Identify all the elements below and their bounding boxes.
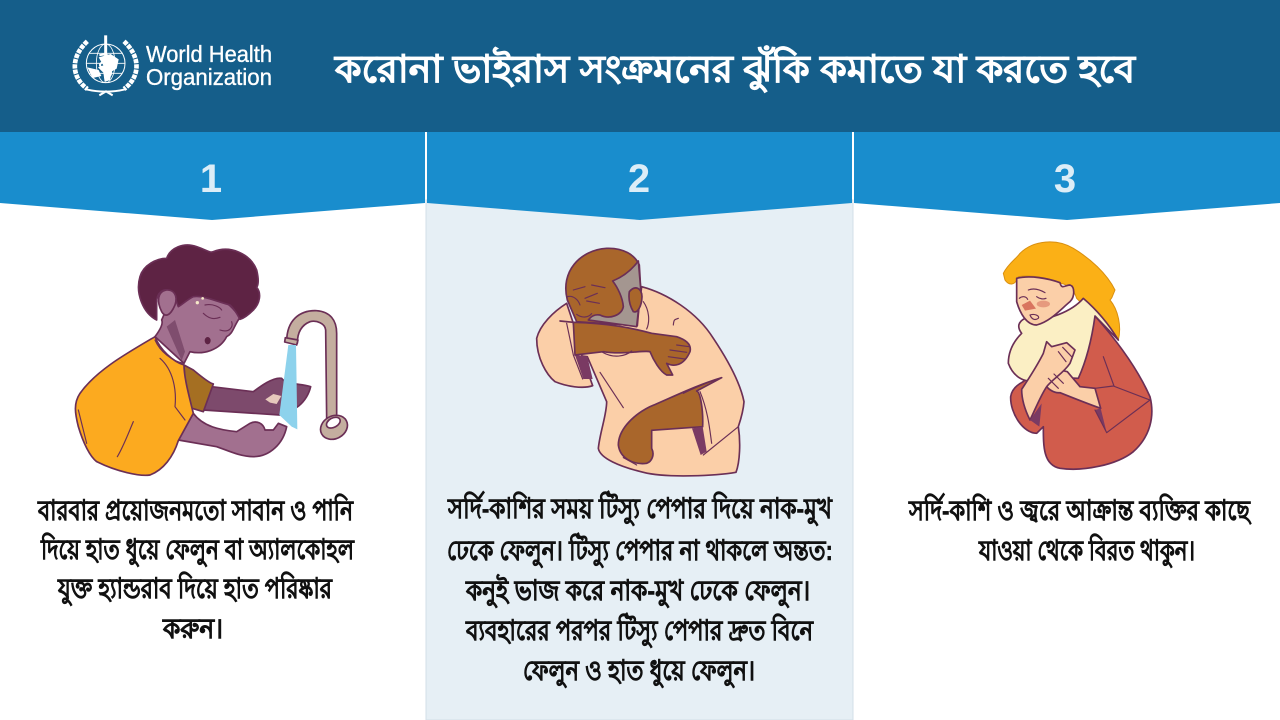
fever cheeks and nose — [1022, 301, 1050, 311]
WHO logo — [75, 35, 272, 95]
scarf — [1008, 298, 1118, 381]
faucet — [285, 311, 352, 444]
neck and face — [155, 293, 240, 363]
icon: sick woman with scarf — [1003, 242, 1152, 469]
face — [1017, 277, 1074, 325]
step 3 text: যাওয়া থেকে বিরত থাকুন। — [978, 533, 1195, 568]
panel: header band — [0, 0, 1280, 132]
step 2 text: সর্দি-কাশির সময় টিস্যু পেপার দিয়ে নাক-মুখ — [447, 490, 833, 526]
water stream — [279, 345, 297, 429]
panel: centre column background — [426, 200, 853, 720]
beard and side hair — [588, 261, 641, 327]
raised forearm — [560, 321, 690, 375]
title: করোনা ভাইরাস সংক্রমনের ঝুঁকি কমাতে যা করতে হবে — [333, 45, 1137, 94]
step 1 number banner: 1 — [200, 157, 222, 201]
step 2 text: কনুই ভাজ করে নাক-মুখ ঢেকে ফেলুন। — [465, 574, 810, 608]
step 2 text — [447, 490, 833, 688]
upper hand and forearm — [1022, 342, 1075, 420]
panel: step 3 — [854, 132, 1280, 568]
logo wordmark: Organization — [146, 64, 272, 90]
step 1 number banner — [0, 132, 425, 220]
icon: WHO emblem — [75, 35, 136, 95]
facial features — [196, 297, 232, 344]
head — [566, 248, 641, 326]
step 1 text: করুন। — [162, 613, 223, 644]
step 1 text: যুক্ত হ্যান্ডরাব দিয়ে হাত পরিষ্কার — [57, 571, 333, 606]
ear — [629, 288, 642, 312]
step 2 number banner — [427, 132, 852, 220]
hair — [139, 245, 260, 320]
panel: step 1 — [0, 132, 425, 644]
step 3 number banner — [854, 132, 1280, 220]
step 2 number banner: 2 — [628, 157, 650, 201]
step 1 text — [37, 493, 355, 644]
step 1 text: দিয়ে হাত ধুয়ে ফেলুন বা অ্যালকোহল — [40, 532, 355, 567]
step 3 text — [908, 493, 1252, 568]
logo wordmark — [146, 41, 272, 90]
hair — [1003, 242, 1120, 340]
robe sleeve raised — [537, 303, 593, 387]
eyes and mouth — [1019, 289, 1046, 319]
robe body — [573, 287, 744, 476]
icon: person washing hands — [75, 245, 352, 475]
icon: man coughing into elbow — [537, 248, 744, 476]
lower sleeve shadow — [692, 427, 707, 455]
panel: step 2 — [427, 132, 852, 688]
ear — [159, 290, 176, 315]
step 2 text: ঢেকে ফেলুন। টিস্যু পেপার না থাকলে অন্তত: — [447, 532, 833, 568]
back arm — [203, 378, 311, 415]
step 2 text: ব্যবহারের পরপর টিস্যু পেপার দ্রুত বিনে — [465, 612, 814, 648]
step 3 number banner: 3 — [1054, 157, 1076, 201]
step 1 text: বারবার প্রয়োজনমতো সাবান ও পানি — [37, 493, 354, 526]
facial features — [567, 285, 649, 329]
back sleeve — [184, 365, 213, 412]
lower arm and fist — [618, 378, 722, 464]
front arm — [178, 413, 287, 457]
sleeve shadow — [575, 355, 593, 379]
sleeve folds and shadow — [1030, 357, 1150, 433]
logo wordmark: World Health — [146, 41, 272, 67]
step 2 text: ফেলুন ও হাত ধুয়ে ফেলুন। — [523, 655, 755, 688]
dress — [1011, 316, 1152, 469]
t-shirt — [75, 337, 193, 475]
soap — [265, 394, 281, 404]
lower hand and forearm — [1045, 370, 1101, 408]
